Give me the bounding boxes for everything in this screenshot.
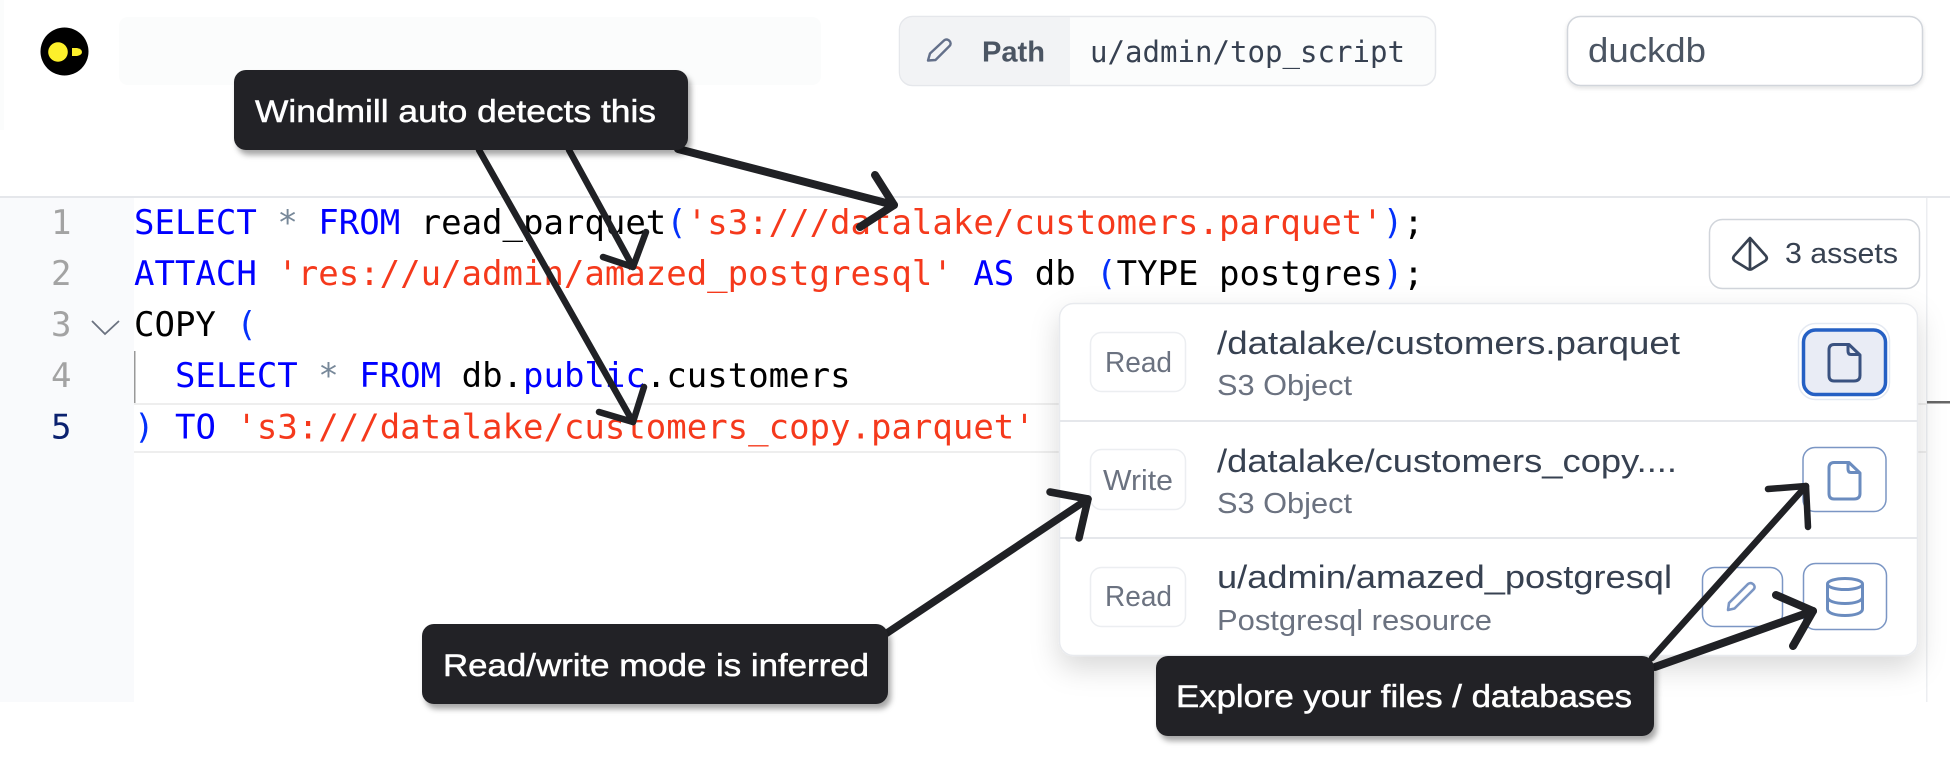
row: amazed_postgresql: Postgresql resource (1217, 605, 1492, 637)
path field (900, 16, 1436, 86)
row: customers.parquet: Read (1105, 347, 1172, 379)
editor frame (0, 196, 1950, 702)
icon: fold chevron (92, 321, 119, 334)
row: customers_copy.parquet (1090, 443, 1886, 520)
language field (1568, 16, 1922, 86)
row: customers.parquet: /datalake/customers.parquet (1217, 325, 1680, 361)
row: customers_copy.parquet: S3 Object (1217, 488, 1352, 520)
arrow: detects to read_parquet path (678, 149, 894, 227)
arrow: explore to database button (1655, 595, 1813, 667)
line numbers: 2 (51, 254, 71, 294)
callout: explore: Explore your files / databases (1176, 678, 1632, 714)
line numbers: 3 (51, 305, 71, 345)
arrow: detects to postgres resource (569, 150, 646, 267)
row: amazed_postgresql: Read (1105, 581, 1172, 613)
code: ) TO 's3:///datalake/customers_copy.parquet' (134, 408, 1035, 448)
arrow: detects to copy target (479, 150, 644, 422)
path label: Path (982, 36, 1045, 68)
row: customers_copy.parquet: /datalake/customers_copy.... (1217, 443, 1677, 479)
callout: auto detection: Windmill auto detects this (255, 93, 656, 129)
line numbers: 5 (51, 408, 71, 448)
line numbers: 1 (51, 203, 71, 243)
code: SELECT * FROM read_parquet('s3:///datalake/customers.parquet'); (134, 203, 1424, 243)
line numbers (51, 203, 71, 448)
path value: u/admin/top_script (1090, 35, 1405, 70)
callout: auto detection (234, 70, 688, 150)
assets count: 3 assets (1785, 238, 1898, 270)
icon: pyramid (1733, 238, 1767, 270)
line numbers: 4 (51, 356, 71, 396)
icon: pencil (928, 40, 951, 60)
assets button (1710, 220, 1920, 288)
code: COPY ( (134, 305, 257, 345)
row: customers.parquet (1090, 324, 1890, 402)
row: amazed_postgresql: u/admin/amazed_postgresql (1217, 559, 1672, 595)
code: SELECT * FROM db.public.customers (134, 356, 851, 396)
summary input placeholder (119, 17, 821, 85)
code: ATTACH 'res://u/admin/amazed_postgresql' AS db (TYPE postgres); (134, 254, 1424, 294)
row: amazed_postgresql (1090, 559, 1886, 637)
row: customers.parquet: S3 Object (1217, 370, 1352, 402)
callout: explore (1156, 656, 1654, 736)
logo (40, 28, 88, 76)
arrow: mode to write badge (887, 492, 1088, 633)
callout: read write mode (422, 624, 888, 704)
code (134, 203, 1424, 448)
callout: read write mode: Read/write mode is inferred (443, 647, 869, 683)
row: customers_copy.parquet: Write (1103, 465, 1173, 497)
language field: duckdb (1588, 32, 1706, 70)
panel: assets list (1060, 304, 1918, 656)
arrow: explore to file button (1652, 486, 1808, 658)
